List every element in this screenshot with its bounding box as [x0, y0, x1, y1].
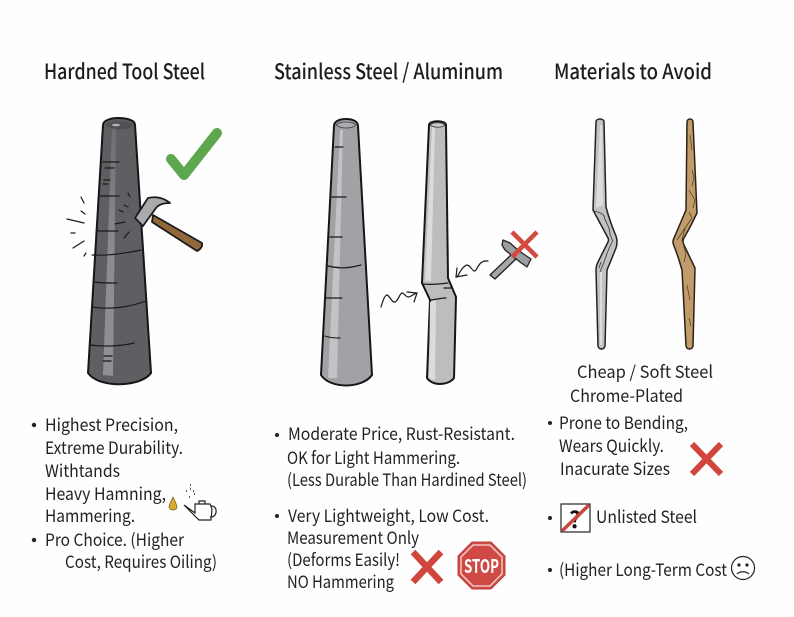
- text: tool steel pros: Withtands: [45, 457, 120, 482]
- column: hardened tool steel: [32, 56, 217, 573]
- text: cheap soft steel label: Cheap / Soft Steel: [577, 358, 713, 383]
- text: stainless steel notes: OK for Light Hammering.: [287, 444, 460, 469]
- icon: red x: [692, 444, 721, 474]
- text: stainless steel notes: Moderate Price, Rust-Resistant.: [288, 420, 515, 445]
- heading: stainless steel / aluminum: Stainless Steel / Aluminum: [274, 56, 503, 86]
- icon: green check mark: [171, 133, 217, 175]
- icon: oil can: [184, 485, 216, 520]
- icon: stop sign: STOP: [464, 552, 499, 579]
- heading: hardened tool steel: Hardned Tool Steel: [44, 56, 205, 86]
- text: aluminum notes: Measurement Only: [287, 524, 419, 549]
- illustration: stainless mandrel: [321, 119, 372, 386]
- column: materials to avoid: [548, 56, 754, 581]
- arrow: squiggle to bend left: [381, 292, 417, 307]
- heading: materials to avoid: Materials to Avoid: [554, 56, 712, 86]
- icon: crossed-out question mark: ?: [569, 501, 581, 535]
- text: tool steel pros: Cost, Requires Oiling): [65, 548, 217, 573]
- column: stainless steel and aluminum: [274, 56, 537, 593]
- text: tool steel pros: Heavy Hamning,: [45, 480, 166, 505]
- text: tool steel pros: [32, 411, 217, 573]
- text: unlisted steel: Unlisted Steel: [596, 503, 697, 528]
- text: stainless steel notes: (Less Durable Than Hardined Steel): [287, 466, 527, 491]
- illustration: bent aluminum mandrel: [422, 121, 456, 384]
- icon: crossed-out question mark: [561, 501, 590, 535]
- illustration: bent rusty mandrel: [673, 119, 697, 349]
- text: cheap steel drawbacks: Prone to Bending,: [559, 409, 688, 434]
- icon: impact sparks: [67, 193, 130, 256]
- text: stainless steel notes: [275, 420, 527, 491]
- text: cheap steel drawbacks: [548, 409, 688, 480]
- text: cheap soft steel label: Chrome-Plated: [570, 382, 683, 407]
- icon: sad face: [732, 556, 754, 580]
- text: higher long-term cost: (Higher Long-Term Cost: [559, 556, 728, 581]
- illustration: dark steel mandrel: [88, 118, 151, 384]
- text: cheap steel drawbacks: Wears Quickly.: [559, 432, 664, 457]
- text: aluminum notes: Very Lightweight, Low Cost.: [288, 502, 489, 527]
- text: aluminum notes: [275, 502, 489, 593]
- icon: red x: [413, 552, 441, 582]
- illustration: bent chrome mandrel: [593, 119, 617, 349]
- arrow: squiggle to bend right: [456, 261, 488, 277]
- text: aluminum notes: (Deforms Easily!: [287, 546, 400, 571]
- text: aluminum notes: NO Hammering: [287, 568, 394, 593]
- text: cheap soft steel label: [570, 358, 713, 407]
- text: tool steel pros: Hammering.: [45, 502, 135, 527]
- text: tool steel pros: Extreme Durability.: [45, 434, 183, 459]
- icon: hammer: [135, 197, 202, 251]
- icon: stop sign: [458, 542, 505, 589]
- text: cheap steel drawbacks: Inacurate Sizes: [560, 455, 670, 480]
- icon: oil drop: [169, 497, 177, 510]
- text: tool steel pros: Highest Precision,: [45, 411, 178, 436]
- icon: crossed-out hammer: [490, 232, 537, 279]
- text: tool steel pros: Pro Choice. (Higher: [45, 526, 184, 551]
- text: unlisted steel: [548, 503, 697, 528]
